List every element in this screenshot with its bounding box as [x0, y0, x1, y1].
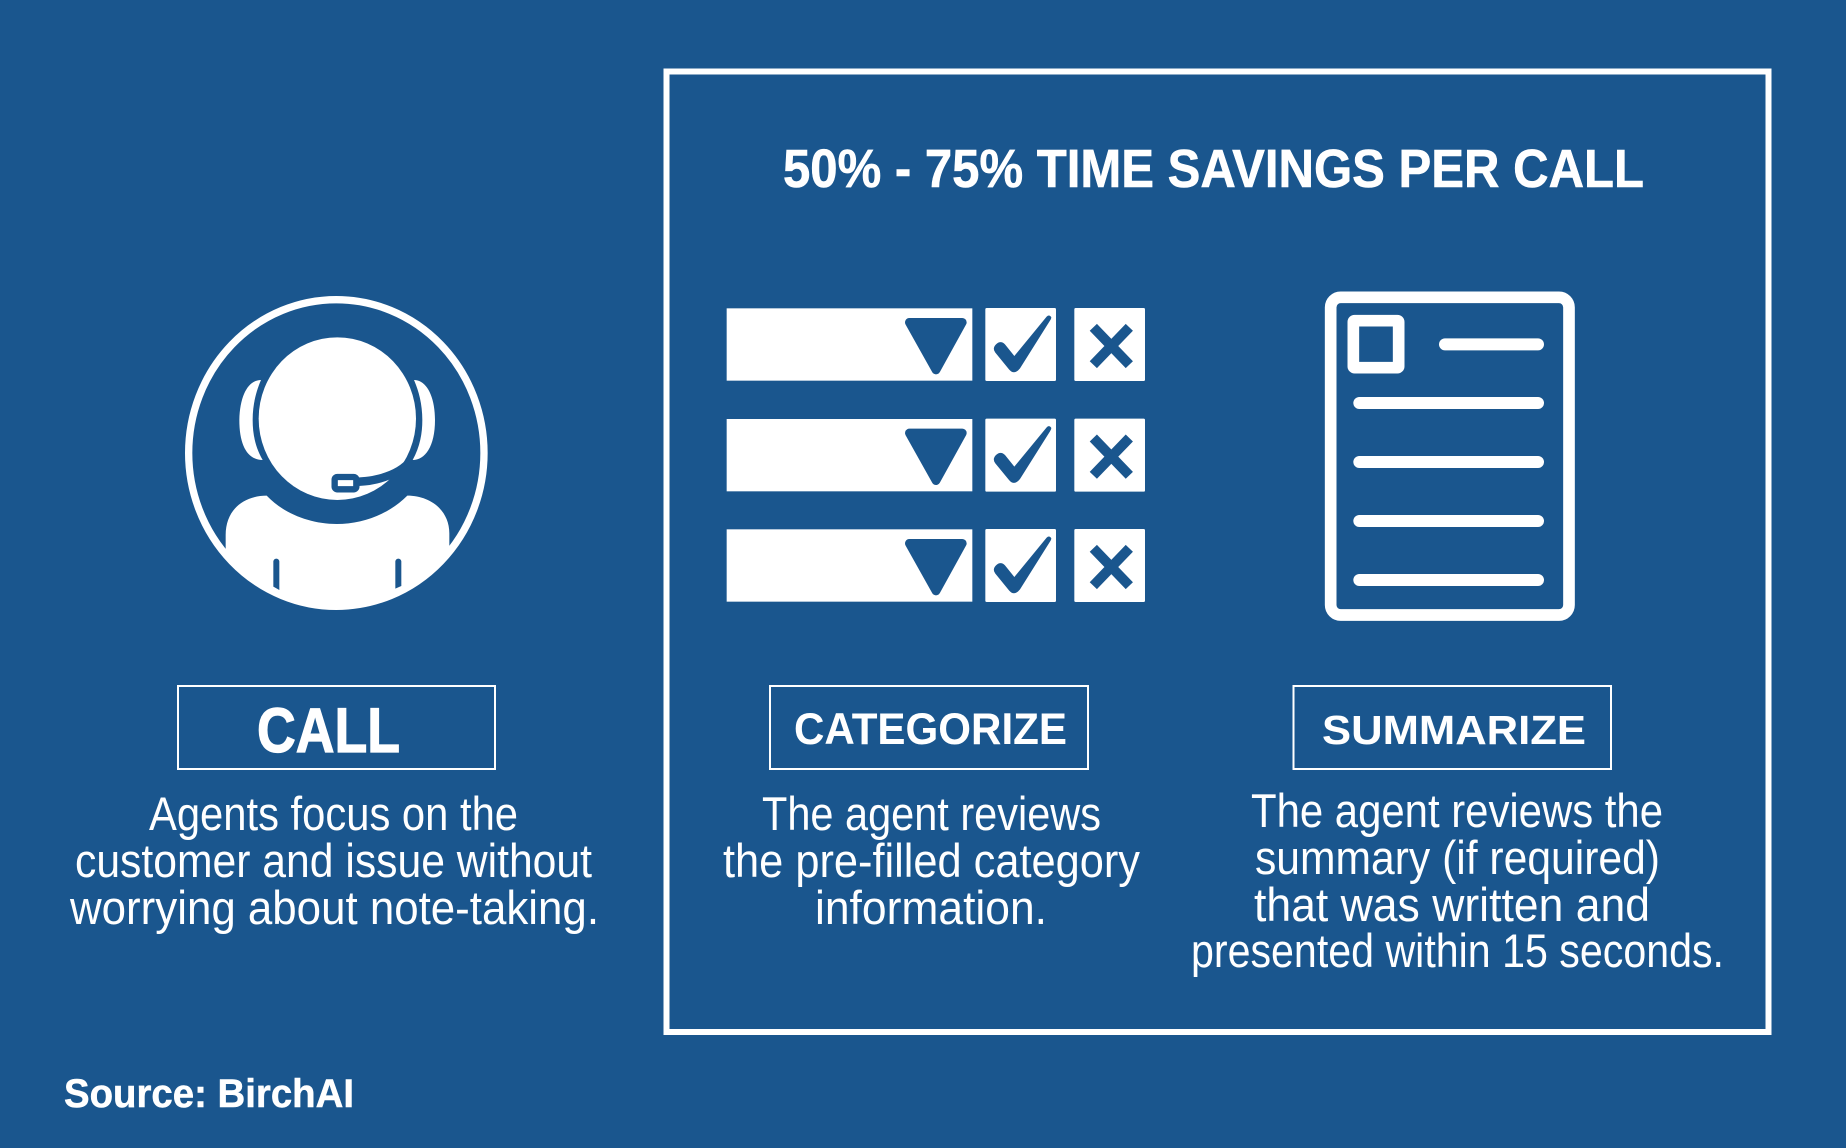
text block: categorize description: The agent reviews — [762, 787, 1101, 840]
text block: summarize description: The agent reviews the — [1251, 784, 1663, 837]
heading: categorize: CATEGORIZE — [794, 705, 1067, 754]
text block: summarize description — [1191, 784, 1724, 977]
icon: microphone — [335, 477, 356, 489]
text block: categorize description: information. — [815, 881, 1047, 934]
icon: left arm line — [273, 559, 279, 590]
document text lines — [1359, 344, 1538, 580]
row 2 — [727, 419, 1145, 492]
icon: call agent with headset — [189, 300, 484, 613]
text block: categorize description: the pre-filled category — [723, 834, 1140, 887]
text block: summarize description: that was written and — [1254, 878, 1650, 931]
heading: call: CALL — [257, 696, 400, 766]
panel: time savings frame — [666, 72, 1768, 1032]
icon: right arm line — [395, 559, 401, 589]
text block: call description: worrying about note-taking. — [69, 881, 599, 934]
row 3 — [727, 529, 1145, 602]
source note: Source: BirchAI — [64, 1072, 354, 1116]
icon: outer ring — [189, 300, 484, 606]
icon: shoulders — [226, 496, 449, 613]
icon: microphone boom — [357, 457, 411, 486]
icon: left ear cup — [239, 380, 263, 460]
text block: categorize description — [723, 787, 1140, 934]
icon: right ear cup — [413, 380, 435, 460]
text block: call description: Agents focus on the — [149, 787, 518, 840]
panel: summarize heading box — [1294, 686, 1611, 769]
text block: summarize description: summary (if required) — [1255, 831, 1660, 884]
text block: summarize description: presented within 15 seconds. — [1191, 924, 1724, 977]
icon: category form rows — [727, 308, 1145, 602]
panel: categorize heading box — [770, 686, 1088, 769]
text block: call description — [69, 787, 599, 934]
icon: head — [259, 337, 416, 500]
text block: call description: customer and issue without — [75, 834, 592, 887]
row 1 — [727, 308, 1145, 381]
title: 50% - 75% TIME SAVINGS PER CALL — [783, 139, 1644, 199]
heading: summarize: SUMMARIZE — [1322, 707, 1586, 753]
document image placeholder — [1353, 321, 1399, 368]
icon: summary document — [1331, 297, 1569, 615]
panel: call heading box — [178, 686, 495, 769]
document outline — [1331, 297, 1569, 615]
